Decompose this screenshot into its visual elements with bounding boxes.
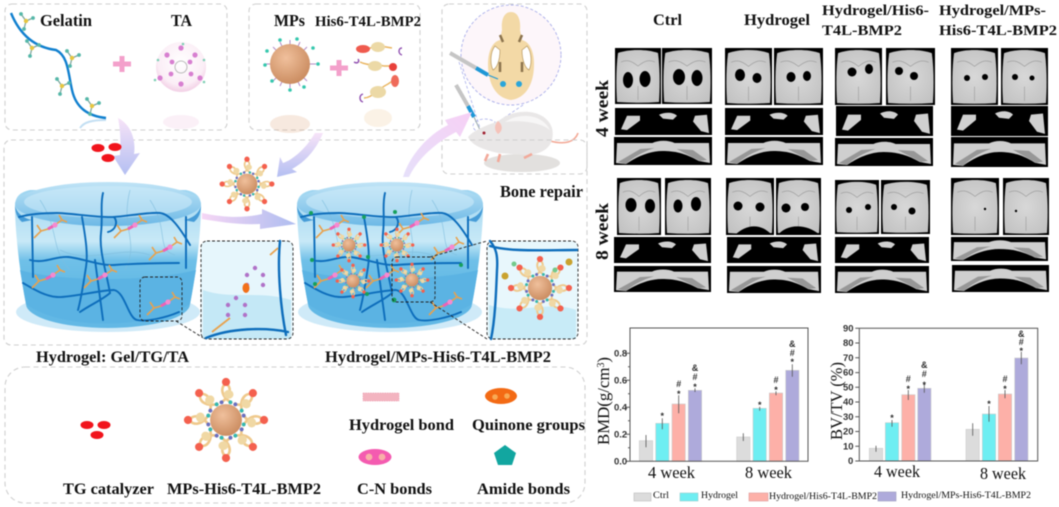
row label: 8 week: 8 week bbox=[592, 203, 612, 260]
tick labels: 40 bbox=[843, 397, 854, 408]
inset: loaded complex bbox=[487, 241, 578, 339]
tick labels: 80 bbox=[843, 338, 854, 349]
column header: Hydrogel/His6-T4L-BMP2: Hydrogel/His6- bbox=[822, 3, 929, 19]
tick labels: 30 bbox=[843, 412, 854, 423]
significance marks: * bbox=[661, 411, 665, 421]
tick labels: 60 bbox=[843, 368, 854, 379]
CT: Ctrl 8 week bbox=[614, 178, 711, 292]
CT: Hydrogel 8 week bbox=[726, 178, 821, 293]
category labels: 4 week bbox=[648, 463, 695, 482]
chart legend: Hydrogel bbox=[701, 490, 739, 500]
tick labels: 50 bbox=[843, 382, 854, 393]
CT: Hydrogel 4 week bbox=[725, 48, 823, 165]
icon: lower syringe bbox=[456, 85, 480, 130]
icon: MPs-His6-T4L-BMP2 complex bbox=[220, 157, 274, 211]
embedded complexes bbox=[332, 228, 429, 298]
significance marks: & bbox=[1018, 329, 1025, 339]
label: MPs-His6-T4L-BMP2: MPs-His6-T4L-BMP2 bbox=[167, 481, 321, 498]
tick labels: 0.0 bbox=[614, 456, 627, 468]
bar chart: BV/TV bbox=[827, 323, 1038, 483]
significance marks: # bbox=[676, 379, 681, 389]
label: TA: TA bbox=[171, 11, 193, 30]
chart legend: Ctrl bbox=[653, 490, 670, 500]
dashed magnified circle bbox=[461, 5, 561, 105]
micro-CT image grid bbox=[592, 3, 1057, 293]
CT: Hydrogel/His6 4 week bbox=[835, 48, 935, 166]
tick labels bbox=[843, 323, 854, 467]
bars: 4 week and 8 week bbox=[639, 370, 799, 461]
label: Hydrogel Gel/TG/TA: Hydrogel: Gel/TG/TA bbox=[36, 349, 189, 366]
significance marks: # bbox=[1002, 374, 1008, 384]
category labels: 4 week bbox=[874, 462, 920, 481]
significance marks: # bbox=[790, 348, 795, 358]
panel: MPs and protein bbox=[249, 4, 421, 133]
panel: hydrogel formation bbox=[4, 112, 587, 345]
label: Quinone groups: Quinone groups bbox=[472, 417, 585, 434]
significance marks: # bbox=[906, 374, 911, 384]
zoom box left bbox=[140, 277, 205, 339]
gelatin strand bbox=[11, 13, 106, 118]
inset: TA crosslink bbox=[201, 241, 293, 339]
bars: 4 week and 8 week bbox=[869, 358, 1028, 461]
tick labels: 0.4 bbox=[614, 402, 628, 414]
significance marks: * bbox=[677, 389, 681, 399]
significance marks: * bbox=[774, 385, 778, 395]
icon: TG catalyzer bbox=[92, 143, 122, 162]
icon: MPs-His6-T4L-BMP2 bbox=[184, 378, 268, 462]
significance marks: * bbox=[1020, 346, 1024, 356]
tick labels: 70 bbox=[843, 353, 854, 364]
label: Gelatin: Gelatin bbox=[40, 11, 93, 30]
significance marks: * bbox=[693, 382, 697, 392]
axis label: BMD: BMD(g/cm bbox=[594, 367, 613, 445]
significance marks: # bbox=[1019, 337, 1024, 347]
microparticle bbox=[263, 37, 320, 92]
column header: Hydrogel/MPs-His6-T4L-BMP2: Hydrogel/MPs- bbox=[939, 3, 1046, 19]
significance marks: * bbox=[758, 400, 762, 410]
icon: hydrogel bond spring bbox=[363, 393, 399, 401]
TA molecule bbox=[154, 42, 206, 92]
label: His6-T4L-BMP2: His6-T4L-BMP2 bbox=[315, 14, 421, 30]
significance marks: * bbox=[1003, 384, 1007, 394]
column header: Hydrogel/MPs-His6-T4L-BMP2: His6-T4L-BMP2 bbox=[939, 23, 1057, 39]
panel: bone repair in rat bbox=[442, 4, 587, 201]
tick labels: 0.8 bbox=[614, 348, 627, 360]
amide bond dots bbox=[309, 210, 463, 302]
significance marks: # bbox=[922, 369, 927, 379]
reflections bbox=[270, 109, 392, 133]
CT: Hydrogel/MPs 4 week bbox=[951, 48, 1048, 167]
icon: quinone groups bbox=[485, 388, 517, 404]
arrow: gelatin to hydrogel bbox=[113, 118, 140, 175]
label: TG catalyzer: TG catalyzer bbox=[63, 481, 154, 498]
arrow: to bone repair bbox=[403, 112, 472, 177]
tick labels: 0.6 bbox=[614, 376, 627, 386]
significance marks: & bbox=[921, 360, 928, 370]
significance marks bbox=[661, 339, 796, 421]
icon: C-N bonds bbox=[358, 449, 392, 465]
label: Hydrogel/MPs-His6-T4L-BMP2: Hydrogel/MPs-His6-T4L-BMP2 bbox=[325, 349, 551, 366]
tick labels: 10 bbox=[843, 441, 854, 452]
column header: Ctrl: Ctrl bbox=[653, 12, 683, 29]
CT: Ctrl 4 week bbox=[614, 48, 712, 165]
gelatin side groups bbox=[19, 12, 101, 116]
significance marks: * bbox=[890, 413, 894, 423]
significance marks bbox=[890, 329, 1025, 423]
hydrogel cylinder right bbox=[297, 182, 483, 332]
significance marks: # bbox=[692, 372, 698, 382]
His6-T4L-BMP2 proteins bbox=[354, 42, 402, 102]
significance marks: * bbox=[987, 399, 991, 409]
zoom box right bbox=[392, 241, 487, 339]
category labels bbox=[648, 463, 792, 482]
icon: rat bbox=[468, 112, 578, 172]
significance marks: # bbox=[773, 375, 779, 385]
category labels bbox=[874, 462, 1026, 483]
column header: Hydrogel: Hydrogel bbox=[744, 12, 811, 29]
crosslinks bbox=[314, 213, 464, 315]
panel: gelatin and TA bbox=[5, 4, 227, 130]
tick labels bbox=[614, 348, 628, 468]
panel: legend of components bbox=[5, 367, 585, 503]
tick labels: 20 bbox=[843, 426, 854, 438]
CT: Hydrogel/MPs 8 week bbox=[951, 178, 1049, 292]
arrow: MPs to complex bbox=[277, 133, 323, 177]
row label: 4 week: 4 week bbox=[592, 80, 612, 137]
chart legend: Hydrogel/His6-T4L-BMP2 bbox=[769, 491, 877, 501]
tick labels: 0.2 bbox=[614, 430, 627, 440]
tick labels: 90 bbox=[843, 323, 854, 334]
icon: upper syringe bbox=[450, 53, 498, 79]
CT: Hydrogel/His6 8 week bbox=[835, 180, 930, 293]
plus sign bbox=[330, 60, 348, 76]
axis label: BV/TV: BV/TV (%) bbox=[827, 362, 846, 440]
label: C-N bonds: C-N bonds bbox=[357, 481, 432, 498]
significance marks: * bbox=[907, 384, 911, 394]
category labels: 8 week bbox=[745, 463, 792, 482]
label: Hydrogel bond: Hydrogel bond bbox=[349, 417, 454, 434]
reflections bbox=[80, 115, 199, 129]
arrow: hydrogel to loaded hydrogel bbox=[202, 209, 296, 229]
error bars bbox=[646, 364, 792, 447]
bar chart: BMD bbox=[594, 328, 808, 482]
label: Amide bonds: Amide bonds bbox=[477, 481, 570, 498]
axis label: BMD: 3 bbox=[596, 363, 607, 368]
crosslinks bbox=[32, 215, 182, 315]
significance marks: * bbox=[791, 357, 795, 367]
plot frame and ticks bbox=[855, 328, 1038, 461]
label: Bone repair: Bone repair bbox=[500, 182, 583, 201]
label: MPs: MPs bbox=[274, 11, 305, 30]
significance marks: & bbox=[789, 339, 796, 349]
hydrogel cylinder left bbox=[15, 182, 201, 332]
error bars bbox=[876, 352, 1021, 452]
icon: amide bonds bbox=[494, 445, 516, 465]
tick labels: 0 bbox=[848, 456, 853, 467]
icon: TG catalyzer bbox=[80, 421, 110, 439]
axis label: BMD: ) bbox=[594, 357, 613, 363]
chart legend bbox=[634, 490, 1031, 501]
significance marks: & bbox=[692, 363, 699, 373]
plot frame and ticks bbox=[626, 328, 808, 461]
category labels: 8 week bbox=[980, 464, 1026, 483]
plus sign bbox=[113, 56, 131, 72]
significance marks: * bbox=[923, 380, 927, 390]
icon: skull bbox=[488, 12, 534, 100]
chart legend: Hydrogel/MPs-His6-T4L-BMP2 bbox=[901, 490, 1031, 500]
column header: Hydrogel/His6-T4L-BMP2: T4L-BMP2 bbox=[822, 23, 902, 39]
